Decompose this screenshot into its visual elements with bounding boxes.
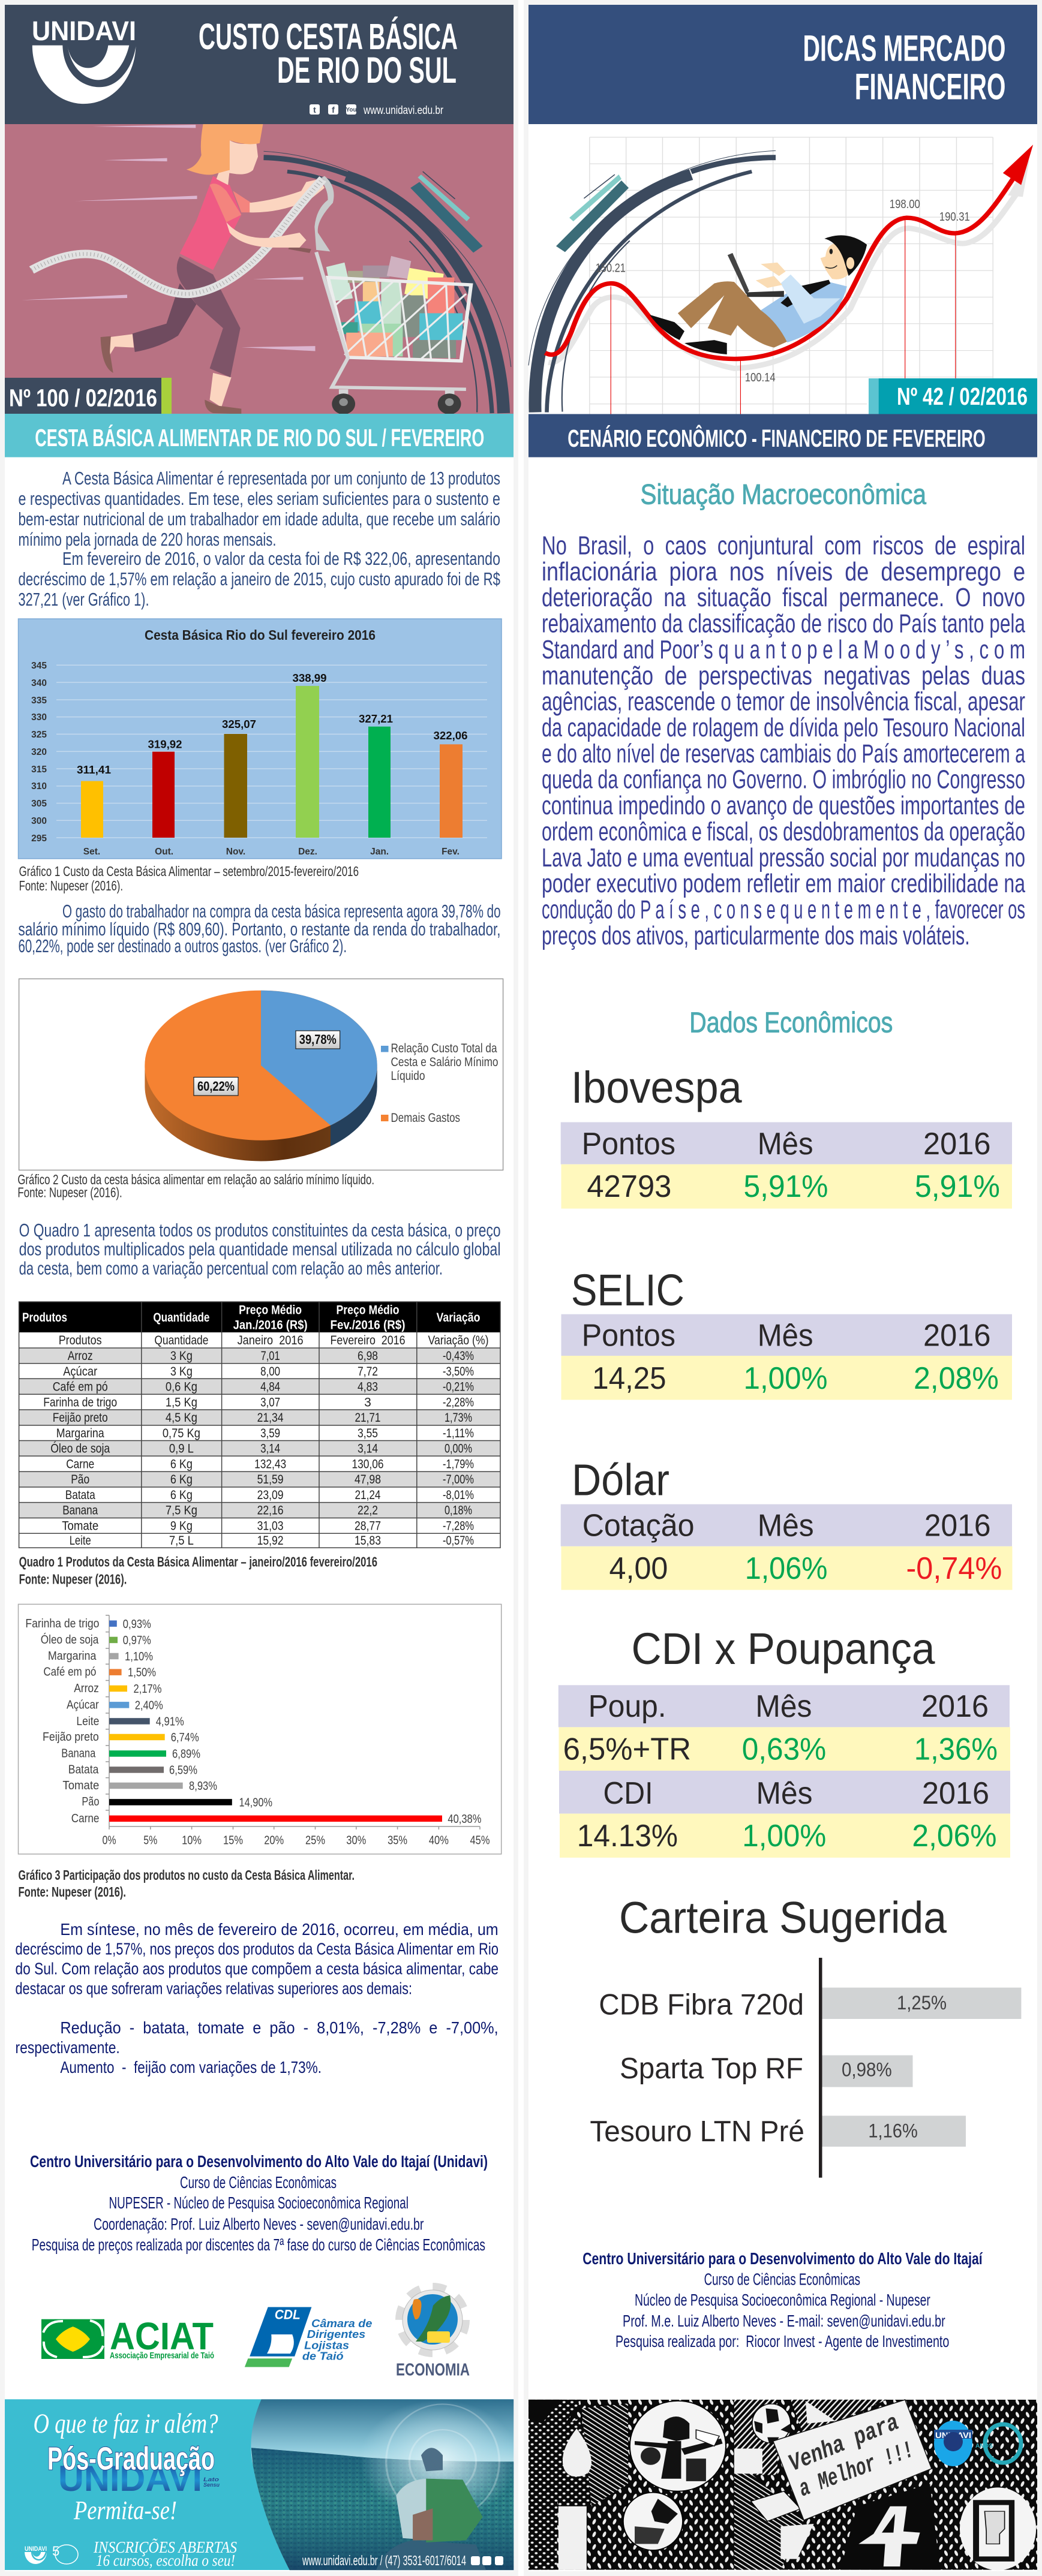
table body: 21,71 xyxy=(355,1411,380,1425)
bar chart: participação dos produtos: 0,93% xyxy=(123,1618,151,1631)
footer credits: left: Centro Universitário para o Desenvolvimento do Alto Vale do Itajaí (Unidavi) xyxy=(30,2152,488,2171)
legend: Relação Custo Total da xyxy=(391,1042,497,1055)
caption: Gráfico 2: Fonte: Nupeser (2016). xyxy=(17,1185,122,1200)
banner: Pós-Graduação: Lato xyxy=(203,2476,220,2482)
bar chart: Carteira Sugerida: 1,16% xyxy=(868,2120,918,2142)
data table: Dólar: 4,00 xyxy=(609,1551,668,1586)
logo: Unidavi 50 anos over doodle: UNIDAVI xyxy=(935,2430,971,2440)
text block: gasto do trabalhador: 60,22%, pode ser destinado a outros gastos. (ver Gráfico 2). xyxy=(18,935,347,956)
bar chart: participação dos produtos: 1,50% xyxy=(128,1666,156,1679)
bar chart: participação dos produtos: 1,10% xyxy=(125,1650,153,1663)
table body: Arroz xyxy=(68,1349,93,1363)
table body: Açúcar xyxy=(63,1365,97,1379)
text block: intro: bem-estar nutricional de um trabalhador em idade adulta, que recebe um salário xyxy=(18,508,500,529)
banner: Pós-Graduação: Pós-Graduação xyxy=(47,2441,215,2477)
table body: 3 Kg xyxy=(170,1349,193,1363)
table body: 15,83 xyxy=(355,1534,381,1548)
issue tag: left: Nº 100 / 02/2016 xyxy=(9,384,157,412)
bar chart: Cesta Básica Rio do Sul: 338,99 xyxy=(293,672,326,684)
bar chart: Cesta Básica Rio do Sul: 319,92 xyxy=(148,739,182,751)
bar chart: participação dos produtos: 14,90% xyxy=(239,1796,272,1810)
bar chart: participação dos produtos: Café em pó xyxy=(43,1666,96,1679)
bar chart: participação dos produtos: 35% xyxy=(388,1834,407,1847)
social icons and site address xyxy=(310,104,444,117)
data table: Dólar: 2016 xyxy=(924,1509,991,1543)
table header: Variação xyxy=(437,1311,480,1325)
table body: 21,34 xyxy=(257,1411,284,1425)
table body: Produtos xyxy=(59,1334,102,1347)
sign: Venha para a Melhor: a Melhor !!! xyxy=(795,2437,918,2503)
caption: Gráfico 3 xyxy=(18,1867,355,1900)
data table: CDI x Poupança xyxy=(558,1624,1010,1858)
text block: intro: 327,21 (ver Gráfico 1). xyxy=(18,589,149,610)
logo: CDL Taió: Câmara de xyxy=(311,2318,372,2330)
panel: right header xyxy=(528,5,1037,124)
table body: -2,28% xyxy=(443,1396,474,1409)
table body: 6 Kg xyxy=(170,1457,193,1471)
table body: Fevereiro 2016 xyxy=(330,1334,406,1347)
data table: CDI x Poupança: 6,5%+TR xyxy=(563,1732,691,1767)
table body: Margarina xyxy=(56,1427,104,1440)
bar chart: Cesta Básica Rio do Sul: 305 xyxy=(31,799,47,809)
sign: Venha para a Melhor xyxy=(773,2400,932,2520)
table body: -1,79% xyxy=(443,1457,474,1471)
bar chart: Cesta Básica Rio do Sul: Set. xyxy=(83,847,100,857)
data table: Ibovespa: Pontos xyxy=(582,1127,675,1161)
footer credits: left: NUPESER - Núcleo de Pesquisa Socioeconômica Regional xyxy=(109,2193,409,2212)
caption: Gráfico 2 xyxy=(17,1172,374,1200)
bar chart: Cesta Básica Rio do Sul: 320 xyxy=(31,747,47,757)
bar chart: Cesta Básica Rio do Sul: 330 xyxy=(31,712,47,723)
data table: SELIC: 2,08% xyxy=(914,1361,999,1396)
logo: Economia: ECONOMIA xyxy=(396,2361,470,2380)
table body: 6 Kg xyxy=(170,1488,193,1502)
table body: 8,00 xyxy=(260,1365,280,1379)
text block: síntese: respectivamente. xyxy=(16,2038,120,2057)
table header: Preço Médio xyxy=(336,1304,400,1317)
logo: Unidavi xyxy=(32,16,136,104)
data table: CDI x Poupança: 2,06% xyxy=(912,1819,997,1853)
table body: Farinha de trigo xyxy=(43,1396,117,1409)
bar chart: Cesta Básica Rio do Sul: Jan. xyxy=(370,847,389,857)
logo: CDL Taió: CDL xyxy=(275,2307,301,2322)
table body: Banana xyxy=(62,1504,98,1517)
table body: 15,92 xyxy=(257,1534,284,1548)
bar chart: Carteira Sugerida: 1,25% xyxy=(897,1992,947,2014)
table body: 31,03 xyxy=(257,1519,284,1533)
data table: Ibovespa: Ibovespa xyxy=(571,1063,742,1112)
banner: Pós-Graduação: INSCRIÇÕES ABERTAS xyxy=(93,2538,237,2556)
data table: Ibovespa: 5,91% xyxy=(915,1169,1000,1204)
heading: Dados Econômicos: Dados Econômicos xyxy=(689,1007,893,1039)
table body: 3,14 xyxy=(260,1442,280,1456)
bar chart: participação dos produtos: Banana xyxy=(61,1747,96,1761)
table body: 0,00% xyxy=(445,1442,472,1456)
table body: -0,21% xyxy=(443,1380,474,1394)
data table: Ibovespa: 42793 xyxy=(587,1169,671,1204)
mini logo: Unidavi 50 anos xyxy=(25,2544,78,2564)
table header: Quantidade xyxy=(153,1311,209,1325)
table body: Café em pó xyxy=(53,1380,108,1394)
text block: intro: Em fevereiro de 2016, o valor da cesta foi de R$ 322,06, apresentando xyxy=(62,548,500,569)
bar chart: participação dos produtos: 4,91% xyxy=(156,1715,184,1728)
bar chart: participação dos produtos: 40% xyxy=(429,1834,449,1847)
logo: CDL Taió: Dirigentes xyxy=(307,2328,365,2340)
bar chart: Cesta Básica Rio do Sul: 345 xyxy=(31,661,47,671)
bar chart: Cesta Básica Rio do Sul: Out. xyxy=(155,847,173,857)
table body: 23,09 xyxy=(257,1488,284,1502)
table body: 4,84 xyxy=(260,1380,280,1394)
bar chart: participação dos produtos: 0% xyxy=(102,1834,116,1847)
text block: síntese: destacar os que sofreram variações relativas superiores aos demais: xyxy=(16,1979,412,1997)
table body: Quantidade xyxy=(154,1334,208,1347)
table body: Óleo de soja xyxy=(50,1442,110,1456)
table body: 0,18% xyxy=(445,1504,472,1517)
bar chart: Cesta Básica Rio do Sul: 300 xyxy=(31,816,47,826)
bar chart: Cesta Básica Rio do Sul: 322,06 xyxy=(433,730,468,742)
data table: SELIC: 2016 xyxy=(923,1319,991,1353)
legend xyxy=(381,1042,498,1125)
bar chart: participação dos produtos: Leite xyxy=(76,1715,99,1728)
bar chart: participação dos produtos: 45% xyxy=(470,1834,490,1847)
illustration: businessman on market curve xyxy=(528,137,1033,414)
footer credits: right: Curso de Ciências Econômicas xyxy=(704,2270,860,2289)
text block: intro: e respectivas quantidades. Em tese, eles seriam suficientes para o sustento e xyxy=(18,488,500,509)
logo: CDL Taió xyxy=(245,2307,372,2367)
data label: 60,22%: 60,22% xyxy=(197,1079,235,1094)
data table: Dólar: Cotação xyxy=(582,1509,695,1543)
data table: Ibovespa xyxy=(561,1063,1012,1209)
table body: Pão xyxy=(71,1473,89,1486)
pie chart: custo em relação ao salário xyxy=(19,979,503,1170)
bar chart: Cesta Básica Rio do Sul: Nov. xyxy=(226,847,245,857)
table body: 21,24 xyxy=(355,1488,381,1502)
table body: 0,75 Kg xyxy=(163,1427,200,1440)
table body: Leite xyxy=(70,1534,91,1548)
bar chart: participação dos produtos: 2,17% xyxy=(133,1683,162,1696)
data table: SELIC: Pontos xyxy=(582,1319,675,1353)
table body: -7,00% xyxy=(443,1473,474,1486)
table header: Jan./2016 (R$) xyxy=(233,1318,308,1332)
bar chart: Carteira Sugerida: Sparta Top RF xyxy=(620,2053,803,2085)
banner: Pós-Graduação: Permita-se! xyxy=(73,2496,177,2525)
logo: ACIAT: ACIAT xyxy=(110,2315,214,2358)
banner: Pós-Graduação xyxy=(5,2399,520,2570)
table body: 1,73% xyxy=(445,1411,472,1425)
illustration: doodle banner Venha para a Melhor xyxy=(528,2400,1037,2570)
bar chart: participação dos produtos: 25% xyxy=(305,1834,325,1847)
bar chart: Cesta Básica Rio do Sul: Cesta Básica Rio do Sul fevereiro 2016 xyxy=(145,627,376,643)
bar chart: Carteira Sugerida: CDB Fibra 720d xyxy=(599,1988,804,2021)
illustration: businessman on market curve: 150.21 xyxy=(596,262,626,275)
table body: -3,50% xyxy=(443,1365,474,1379)
text block: intro: decréscimo de 1,57% em relação a janeiro de 2015, cujo custo apurado foi de R$ xyxy=(18,568,500,589)
text block: síntese xyxy=(16,1920,499,2077)
bar chart: participação dos produtos: 6,89% xyxy=(172,1747,200,1761)
text block: síntese: do Sul. Com relação aos produtos que compõem a cesta básica alimentar, cabe xyxy=(16,1960,499,1978)
bar chart: participação dos produtos: Açúcar xyxy=(67,1698,99,1711)
bar chart: Cesta Básica Rio do Sul: 295 xyxy=(31,833,47,844)
data label: 39,78%: 39,78% xyxy=(299,1032,337,1047)
caption: Quadro 1: Fonte: Nupeser (2016). xyxy=(19,1572,127,1587)
logo: Unidavi: UNIDAVI xyxy=(32,16,136,46)
table body: 51,59 xyxy=(257,1473,284,1486)
text block: Quadro 1 intro: da cesta, bem como a variação percentual com relação ao mês anterior. xyxy=(19,1258,443,1279)
bar chart: Cesta Básica Rio do Sul: 311,41 xyxy=(77,764,111,776)
legend: Líquido xyxy=(391,1069,425,1083)
table body: -1,11% xyxy=(443,1427,474,1440)
banner photo: hiker over forest xyxy=(251,2399,520,2570)
text block: síntese: decréscimo de 1,57%, nos preços dos produtos da Cesta Básica Alimentar em Rio xyxy=(16,1940,499,1958)
social icons and site address: You xyxy=(346,107,357,113)
logo: CDL Taió: Lojistas xyxy=(304,2339,349,2351)
table body: 3 xyxy=(364,1396,371,1409)
bar chart: participação dos produtos: Óleo de soja xyxy=(41,1633,99,1647)
caption: Gráfico 2: Gráfico 2 Custo da cesta básica alimentar em relação ao salário mínimo líquido. xyxy=(17,1172,374,1187)
banner: Pós-Graduação: O que te faz ir além? xyxy=(34,2408,218,2439)
bar chart: participação dos produtos: 40,38% xyxy=(448,1813,482,1826)
bar chart: Cesta Básica Rio do Sul: Fev. xyxy=(442,847,460,857)
bar chart: participação dos produtos: 0,97% xyxy=(123,1634,151,1647)
data table: Dólar: Mês xyxy=(758,1509,814,1543)
table body: -0,43% xyxy=(443,1349,474,1363)
legend: Cesta e Salário Mínimo xyxy=(391,1055,498,1069)
social icons and site address: f xyxy=(332,105,335,115)
footer credits: left: Curso de Ciências Econômicas xyxy=(180,2173,337,2192)
data table: Dólar: -0,74% xyxy=(906,1551,1002,1586)
bar chart: participação dos produtos: 8,93% xyxy=(189,1780,217,1793)
bar chart: participação dos produtos: 20% xyxy=(264,1834,284,1847)
table body: 0,9 L xyxy=(169,1442,194,1456)
data table: CDI x Poupança: 1,36% xyxy=(914,1732,998,1767)
data table: Ibovespa: Mês xyxy=(758,1127,813,1161)
footer credits: left xyxy=(30,2152,488,2254)
data table: Dólar: 1,06% xyxy=(745,1551,827,1586)
text block: intro: mínimo pela jornada de 220 horas mensais. xyxy=(18,529,276,550)
table body: 9 Kg xyxy=(170,1519,193,1533)
heading band: Cesta Básica: CESTA BÁSICA ALIMENTAR DE RIO DO SUL / FEVEREIRO xyxy=(35,424,484,452)
data table: Ibovespa: 2016 xyxy=(923,1127,991,1161)
sign: Venha para a Melhor: Venha para xyxy=(785,2410,903,2478)
bar chart: Carteira Sugerida xyxy=(590,1892,1021,2178)
footer credits: left: Coordenação: Prof. Luiz Alberto Neves - seven@unidavi.edu.br xyxy=(94,2215,424,2234)
logo: ACIAT: Associação Empresarial de Taió xyxy=(110,2351,214,2361)
bar chart: participação dos produtos: 15% xyxy=(223,1834,243,1847)
table body: 7,01 xyxy=(261,1349,280,1363)
table body: 3,14 xyxy=(358,1442,378,1456)
data table: CDI x Poupança: Mês xyxy=(755,1689,812,1724)
caption: Gráfico 3: Fonte: Nupeser (2016). xyxy=(18,1884,126,1900)
table body: Carne xyxy=(66,1457,94,1471)
data table: SELIC xyxy=(561,1265,1012,1400)
bar chart: Cesta Básica Rio do Sul: 335 xyxy=(31,696,47,706)
banner: Pós-Graduação: www.unidavi.edu.br / (47) 3531-6017/6014 xyxy=(302,2553,466,2568)
illustration: businessman on market curve: 190.31 xyxy=(939,210,970,224)
table body: -0,57% xyxy=(443,1534,474,1548)
bar chart: participação dos produtos: Batata xyxy=(68,1763,99,1776)
table body: 130,06 xyxy=(352,1457,384,1471)
mini logo: Unidavi 50 anos: 5 xyxy=(52,2544,59,2559)
bar chart: Cesta Básica Rio do Sul: 315 xyxy=(31,765,47,775)
banner: Pós-Graduação: Sensu xyxy=(203,2482,220,2488)
table header: Produtos xyxy=(22,1311,67,1325)
logo: CDL Taió: de Taió xyxy=(302,2351,344,2363)
data table: CDI x Poupança: 2016 xyxy=(922,1776,989,1811)
title: CUSTO CESTA BÁSICA xyxy=(199,16,458,57)
issue tag: left xyxy=(5,378,172,414)
text block: gasto do trabalhador: O gasto do trabalhador na compra da cesta básica representa agora 39,78% do xyxy=(62,901,501,922)
footer credits: right xyxy=(582,2249,983,2351)
table body: Feijão preto xyxy=(53,1411,108,1425)
data table: CDI x Poupança: 2016 xyxy=(921,1689,989,1724)
data table: SELIC: 14,25 xyxy=(592,1361,666,1396)
bar chart: participação dos produtos: 5% xyxy=(143,1834,157,1847)
banner: Pós-Graduação: 16 cursos, escolha o seu! xyxy=(96,2551,235,2569)
bar chart: participação dos produtos: Pão xyxy=(82,1795,99,1808)
bar chart: Carteira Sugerida: Carteira Sugerida xyxy=(619,1892,947,1943)
table body: -8,01% xyxy=(443,1488,474,1502)
table body: 1,5 Kg xyxy=(166,1396,197,1409)
table body: 47,98 xyxy=(355,1473,381,1486)
table header xyxy=(22,1304,480,1332)
data table: CDI x Poupança: Mês xyxy=(756,1776,812,1811)
bar chart: Cesta Básica Rio do Sul: 325 xyxy=(31,730,47,740)
caption: Gráfico 1: Fonte: Nupeser (2016). xyxy=(19,878,123,893)
logo: Economia xyxy=(396,2287,470,2380)
illustration: businessman on market curve: 198.00 xyxy=(890,198,920,211)
bar chart: participação dos produtos: Margarina xyxy=(48,1650,97,1663)
heading band: Cesta Básica xyxy=(5,414,514,457)
table body: 6,98 xyxy=(358,1349,378,1363)
legend: Demais Gastos xyxy=(391,1111,460,1125)
title xyxy=(199,16,458,91)
table: Quadro 1 produtos xyxy=(19,1302,500,1548)
bar chart: participação dos produtos: Feijão preto xyxy=(43,1731,99,1744)
table body: 4,83 xyxy=(358,1380,378,1394)
table header: Fev./2016 (R$) xyxy=(330,1318,406,1332)
bar chart: participação dos produtos: 10% xyxy=(182,1834,202,1847)
table body: 4,5 Kg xyxy=(166,1411,197,1425)
table header: Preço Médio xyxy=(239,1304,302,1317)
table body: 3,07 xyxy=(260,1396,280,1409)
table body: 3 Kg xyxy=(170,1365,193,1379)
text block: intro: A Cesta Básica Alimentar é representada por um conjunto de 13 produtos xyxy=(62,468,500,489)
data table: SELIC: SELIC xyxy=(571,1265,684,1315)
bar chart: Cesta Básica Rio do Sul: 327,21 xyxy=(359,713,393,725)
table body: Variação (%) xyxy=(428,1334,488,1347)
table body: -7,28% xyxy=(443,1519,474,1533)
bar chart: participação dos produtos: Farinha de trigo xyxy=(25,1617,99,1630)
data table: CDI x Poupança: CDI x Poupança xyxy=(631,1624,935,1674)
data table: SELIC: 1,00% xyxy=(744,1361,828,1396)
data table: Dólar: Dólar xyxy=(572,1455,669,1504)
caption: Gráfico 1: Gráfico 1 Custo da Cesta Básica Alimentar – setembro/2015-fevereiro/2016 xyxy=(19,863,359,879)
text block: gasto do trabalhador xyxy=(18,901,501,956)
table body: 28,77 xyxy=(355,1519,381,1533)
text block: síntese: Em síntese, no mês de fevereiro de 2016, ocorreu, em média, um xyxy=(60,1920,499,1939)
table body: 22,2 xyxy=(358,1504,378,1517)
social icons and site address: t xyxy=(313,105,316,115)
bar chart: participação dos produtos xyxy=(18,1604,502,1854)
bar chart: participação dos produtos: 6,74% xyxy=(171,1731,199,1744)
data table: Ibovespa: 5,91% xyxy=(744,1169,828,1204)
table body: 6 Kg xyxy=(170,1473,193,1486)
bar chart: participação dos produtos: 2,40% xyxy=(135,1699,163,1713)
bar chart: Cesta Básica Rio do Sul: 340 xyxy=(31,678,47,688)
table body: 7,5 L xyxy=(169,1534,194,1548)
text block: intro xyxy=(18,468,500,610)
data table: CDI x Poupança: Poup. xyxy=(588,1689,666,1724)
title: DE RIO DO SUL xyxy=(277,50,457,91)
table body: Tomate xyxy=(62,1519,98,1533)
banner: Pós-Graduação: UNIDAVI xyxy=(58,2458,202,2499)
bar chart: participação dos produtos: Carne xyxy=(71,1812,99,1825)
table body: 7,72 xyxy=(358,1365,378,1379)
caption: Gráfico 1 xyxy=(19,863,359,893)
text block: síntese: Aumento - feijão com variações de 1,73%. xyxy=(60,2058,322,2077)
footer credits: left: Pesquisa de preços realizada por discentes da 7ª fase do curso de Ciências Econômicas xyxy=(32,2235,485,2254)
data table: SELIC: Mês xyxy=(758,1319,813,1353)
heading band: cenário econômico xyxy=(528,414,1037,457)
bar chart: Cesta Básica Rio do Sul: 325,07 xyxy=(222,718,256,730)
data table: CDI x Poupança: CDI xyxy=(603,1776,653,1811)
bar chart: Carteira Sugerida: Tesouro LTN Pré xyxy=(590,2115,804,2148)
text block: Quadro 1 intro xyxy=(19,1220,501,1279)
text block: Quadro 1 intro: O Quadro 1 apresenta todos os produtos constituintes da cesta básica, o preço xyxy=(19,1220,501,1241)
data table: CDI x Poupança: 1,00% xyxy=(742,1819,826,1853)
issue tag: right xyxy=(869,378,1037,415)
logo: Unidavi 50 anos over doodle: ANOS xyxy=(975,2443,993,2449)
text block: situação macroeconômica xyxy=(542,531,1025,950)
panel: left header xyxy=(5,5,514,124)
logo: ACIAT xyxy=(41,2315,214,2361)
table body: 3,55 xyxy=(358,1427,378,1440)
bar chart: participação dos produtos: 6,59% xyxy=(169,1764,197,1777)
bar chart: Cesta Básica Rio do Sul: 310 xyxy=(31,781,47,792)
text block: síntese: Redução - batata, tomate e pão - 8,01%, -7,28% e -7,00%, xyxy=(60,2018,499,2037)
text block: Quadro 1 intro: dos produtos multiplicados pela quantidade mensal utilizada no cálculo global xyxy=(19,1239,501,1259)
bar chart: Cesta Básica Rio do Sul xyxy=(18,619,502,859)
bar chart: participação dos produtos: 30% xyxy=(346,1834,366,1847)
heading: Situação Macroeconômica: Situação Macroeconômica xyxy=(641,479,927,510)
table body: 0,6 Kg xyxy=(166,1380,197,1394)
table body: Batata xyxy=(65,1488,95,1502)
bar chart: Carteira Sugerida: 0,98% xyxy=(842,2059,892,2081)
logo: Unidavi 50 anos over doodle xyxy=(934,2421,1021,2466)
bar chart: participação dos produtos: Arroz xyxy=(74,1682,99,1695)
caption: Quadro 1: Quadro 1 Produtos da Cesta Básica Alimentar – janeiro/2016 fevereiro/2016 xyxy=(19,1554,377,1570)
table body xyxy=(43,1334,489,1548)
text block: gasto do trabalhador: salário mínimo líquido (R$ 809,60). Portanto, o restante da renda do trabalhador, xyxy=(18,919,500,940)
social icons and site address: www.unidavi.edu.br xyxy=(363,104,444,117)
illustration: businessman on market curve: 100.14 xyxy=(745,371,776,384)
table body: 22,16 xyxy=(257,1504,284,1517)
data table: CDI x Poupança: 14.13% xyxy=(577,1819,678,1853)
table body: Janeiro 2016 xyxy=(238,1334,304,1347)
caption: Quadro 1 xyxy=(19,1554,377,1587)
table body: 132,43 xyxy=(254,1457,286,1471)
bar chart: participação dos produtos: Tomate xyxy=(62,1779,99,1792)
table body: 7,5 Kg xyxy=(166,1504,197,1517)
table body: 3,59 xyxy=(260,1427,280,1440)
mini logo: Unidavi 50 anos: UNIDAVI xyxy=(25,2545,47,2553)
data table: Dólar xyxy=(561,1455,1013,1590)
data table: CDI x Poupança: 0,63% xyxy=(742,1732,826,1767)
illustration: woman running with shopping cart xyxy=(5,124,514,414)
caption: Gráfico 3: Gráfico 3 Participação dos produtos no custo da Cesta Básica Alimentar. xyxy=(18,1867,355,1883)
bar chart: Cesta Básica Rio do Sul: Dez. xyxy=(298,847,317,857)
